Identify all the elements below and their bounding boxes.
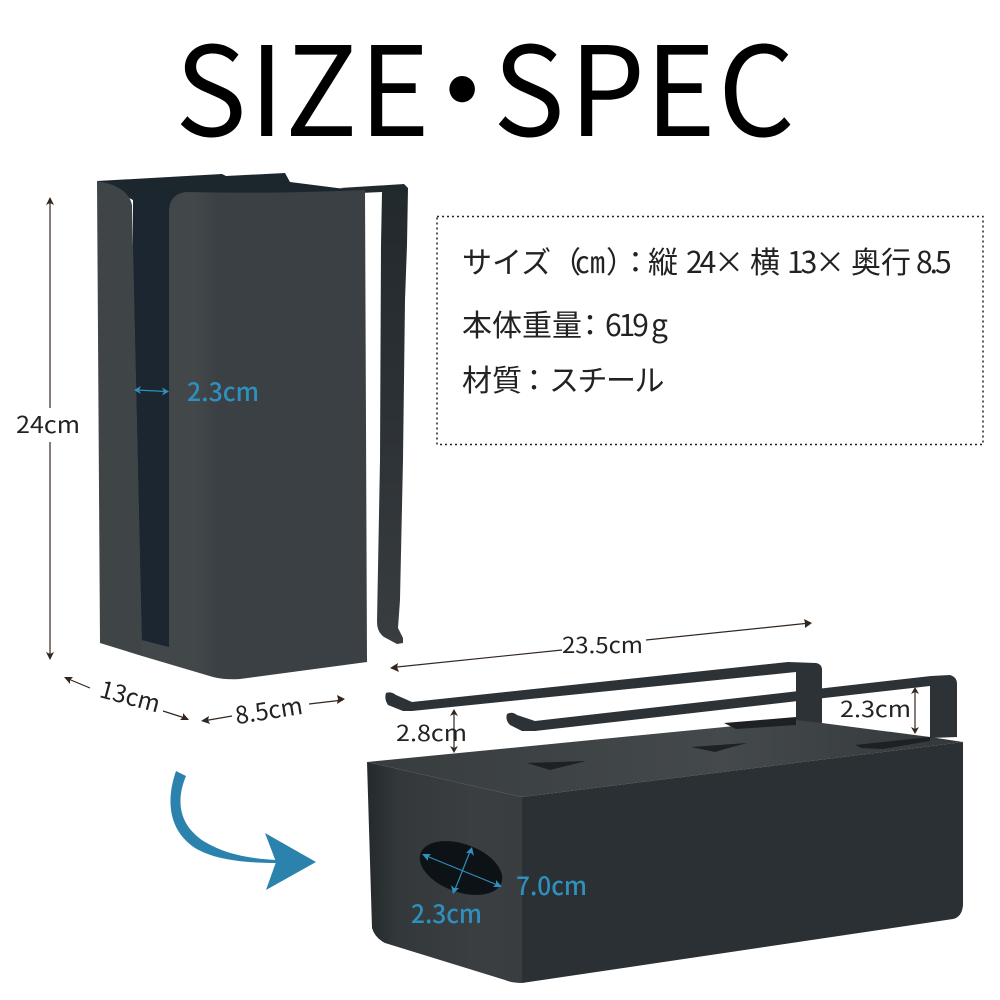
- left face: [367, 762, 522, 983]
- spec: size: 24: [686, 238, 716, 282]
- spec: size: サイズ: [462, 238, 551, 282]
- spec: material: スチール: [549, 356, 663, 400]
- dimension: bar length 23.5cm: [390, 619, 812, 672]
- product photo: upright holder: [97, 173, 408, 679]
- spec: size: 横: [750, 238, 780, 282]
- spec: weight: ：: [575, 301, 605, 345]
- curved arrow: [170, 771, 316, 890]
- back hanger: [385, 662, 822, 727]
- dimension: height 24cm: [16, 197, 80, 660]
- hanger strip: [340, 184, 408, 644]
- dimension: hanger height 2.3cm: 2.3cm: [840, 692, 911, 724]
- spec: size: 13: [787, 238, 816, 282]
- dimension: opening 2.3cm: [411, 847, 482, 931]
- spec: material: ：: [519, 356, 549, 400]
- top face: [367, 720, 963, 797]
- spec: size: （: [551, 238, 581, 282]
- dimension: height 24cm: 24cm: [16, 406, 80, 440]
- dimension: depth 8.5cm: 8.5cm: [232, 686, 305, 731]
- right face: [522, 742, 963, 983]
- dimension: width 13cm: 13cm: [97, 670, 165, 719]
- spec: size: 縦: [648, 238, 678, 282]
- spec: size: ×: [815, 238, 845, 282]
- spec: size: ：: [620, 238, 650, 282]
- dimension: depth 8.5cm: [201, 686, 345, 731]
- dimension: bar length 23.5cm: 23.5cm: [562, 628, 643, 660]
- dimension: hanger height 2.3cm: [840, 687, 919, 734]
- spec: weight: 本体重量: [462, 301, 582, 345]
- left panel: [97, 181, 142, 656]
- spec: size: ）: [606, 238, 636, 282]
- dimension: clearance 2.8cm: [396, 709, 467, 753]
- spec: weight: 619: [605, 301, 648, 345]
- dimension: slot width 2.3cm: 2.3cm: [187, 373, 259, 409]
- body front right panel: [142, 190, 367, 679]
- dimension: clearance 2.8cm: 2.8cm: [396, 716, 467, 748]
- dimension: slot width 2.3cm: [134, 373, 259, 409]
- dimension: opening 7.0cm: 7.0cm: [516, 867, 587, 903]
- tissue opening: [412, 831, 510, 905]
- spec: size: ×: [714, 238, 744, 282]
- spec: size: 8.5: [916, 238, 951, 282]
- dimension: opening 7.0cm: [422, 854, 587, 903]
- spec: size: ㎝: [575, 238, 605, 282]
- spec: size: 奥行: [851, 238, 911, 282]
- front hanger: [506, 675, 957, 738]
- dimension: width 13cm: [64, 670, 189, 720]
- dimension: opening 2.3cm: 2.3cm: [411, 895, 482, 931]
- spec box: [437, 216, 983, 444]
- slit: [133, 192, 170, 647]
- inner back wall: [97, 173, 364, 650]
- spec: material: 材質: [462, 356, 522, 400]
- product photo: horizontal box: [367, 662, 963, 983]
- spec: weight: g: [651, 301, 668, 345]
- tabs and slots: [527, 717, 930, 770]
